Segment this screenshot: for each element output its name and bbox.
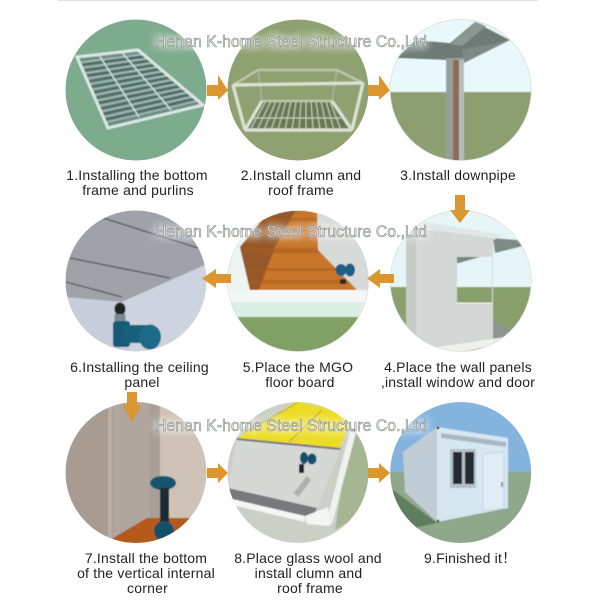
illustration: column and roof frame <box>227 19 369 161</box>
illustration: MGO floor board <box>227 208 369 355</box>
label: step 7: of the vertical internal <box>77 565 215 581</box>
panel: step 4 wall panels <box>381 210 535 390</box>
label: step 5: floor board <box>265 374 335 390</box>
arrow: step 7 to 8 <box>207 463 228 483</box>
label: step 5: 5.Place the MGO <box>243 359 353 375</box>
arrow: step 4 to 5 <box>367 269 394 288</box>
icon: drill <box>336 264 355 284</box>
label: step 7: 7.Install the bottom <box>85 550 207 566</box>
panel: step 2 column and roof frame <box>227 19 369 198</box>
arrow: step 8 to 9 <box>368 463 390 483</box>
panel: step 9 finished <box>389 401 533 566</box>
illustration: downpipe on column <box>389 19 533 162</box>
icon: drill <box>296 452 316 495</box>
illustration: glass wool and panel <box>227 401 369 545</box>
circle outline <box>390 210 531 352</box>
arrow: step 2 to 3 <box>368 75 390 100</box>
watermark: row 1: Henan K-home Steel Structure Co.,Ltd <box>155 33 427 51</box>
panel: step 3 downpipe <box>389 19 533 183</box>
arrow: step 6 to 7 <box>123 392 141 422</box>
illustration: finished container house <box>389 401 533 545</box>
panel: step 7 vertical internal corner <box>65 401 215 596</box>
icon: drill <box>150 476 176 541</box>
illustration: ceiling panel and drill <box>65 210 207 353</box>
circle outline <box>228 210 368 352</box>
watermark: row 1: Henan K-home Steel Structure Co.,Ltd <box>155 33 427 51</box>
label: step 4: ,install window and door <box>381 374 535 390</box>
arrow: step 5 to 6 <box>202 269 231 288</box>
label: step 3: 3.Install downpipe <box>400 167 516 183</box>
label: step 6: 6.Installing the ceiling <box>70 359 209 375</box>
watermark: row 3: Henan K-home Steel Structure Co.,Ltd <box>155 417 427 435</box>
label: step 8: install clumn and <box>255 565 362 581</box>
panel: step 5 floor board <box>227 208 369 390</box>
label: step 4: 4.Place the wall panels <box>384 359 532 375</box>
watermark: row 2: Henan K-home Steel Structure Co.,Ltd <box>155 223 427 241</box>
circle outline <box>390 20 531 160</box>
label: step 1: 1.Installing the bottom <box>66 167 208 183</box>
panel: step 6 ceiling panel <box>65 210 209 390</box>
label: step 1: frame and purlins <box>82 182 194 198</box>
label: step 2: roof frame <box>268 182 334 198</box>
watermark: row 2: Henan K-home Steel Structure Co.,Ltd <box>155 223 427 241</box>
icon: drill <box>113 302 161 350</box>
panel: step 8 glass wool <box>227 401 382 596</box>
label: step 8: 8.Place glass wool and <box>234 550 382 566</box>
illustration: internal corner and drill <box>65 401 208 545</box>
arrow: step 3 to 4 <box>450 195 470 223</box>
label: step 8: roof frame <box>277 580 343 596</box>
label: step 7: corner <box>127 580 168 596</box>
arrow: step 1 to 2 <box>207 75 228 100</box>
label: step 2: 2.Install clumn and <box>241 167 361 183</box>
watermark: row 3: Henan K-home Steel Structure Co.,Ltd <box>155 417 427 435</box>
illustration: wall panels and window <box>389 210 533 356</box>
label: step 6: panel <box>124 374 160 390</box>
label: step 9: 9.Finished it！ <box>424 550 516 566</box>
panel: step 1 bottom frame <box>65 19 208 198</box>
illustration: bottom frame and purlins <box>65 19 207 161</box>
